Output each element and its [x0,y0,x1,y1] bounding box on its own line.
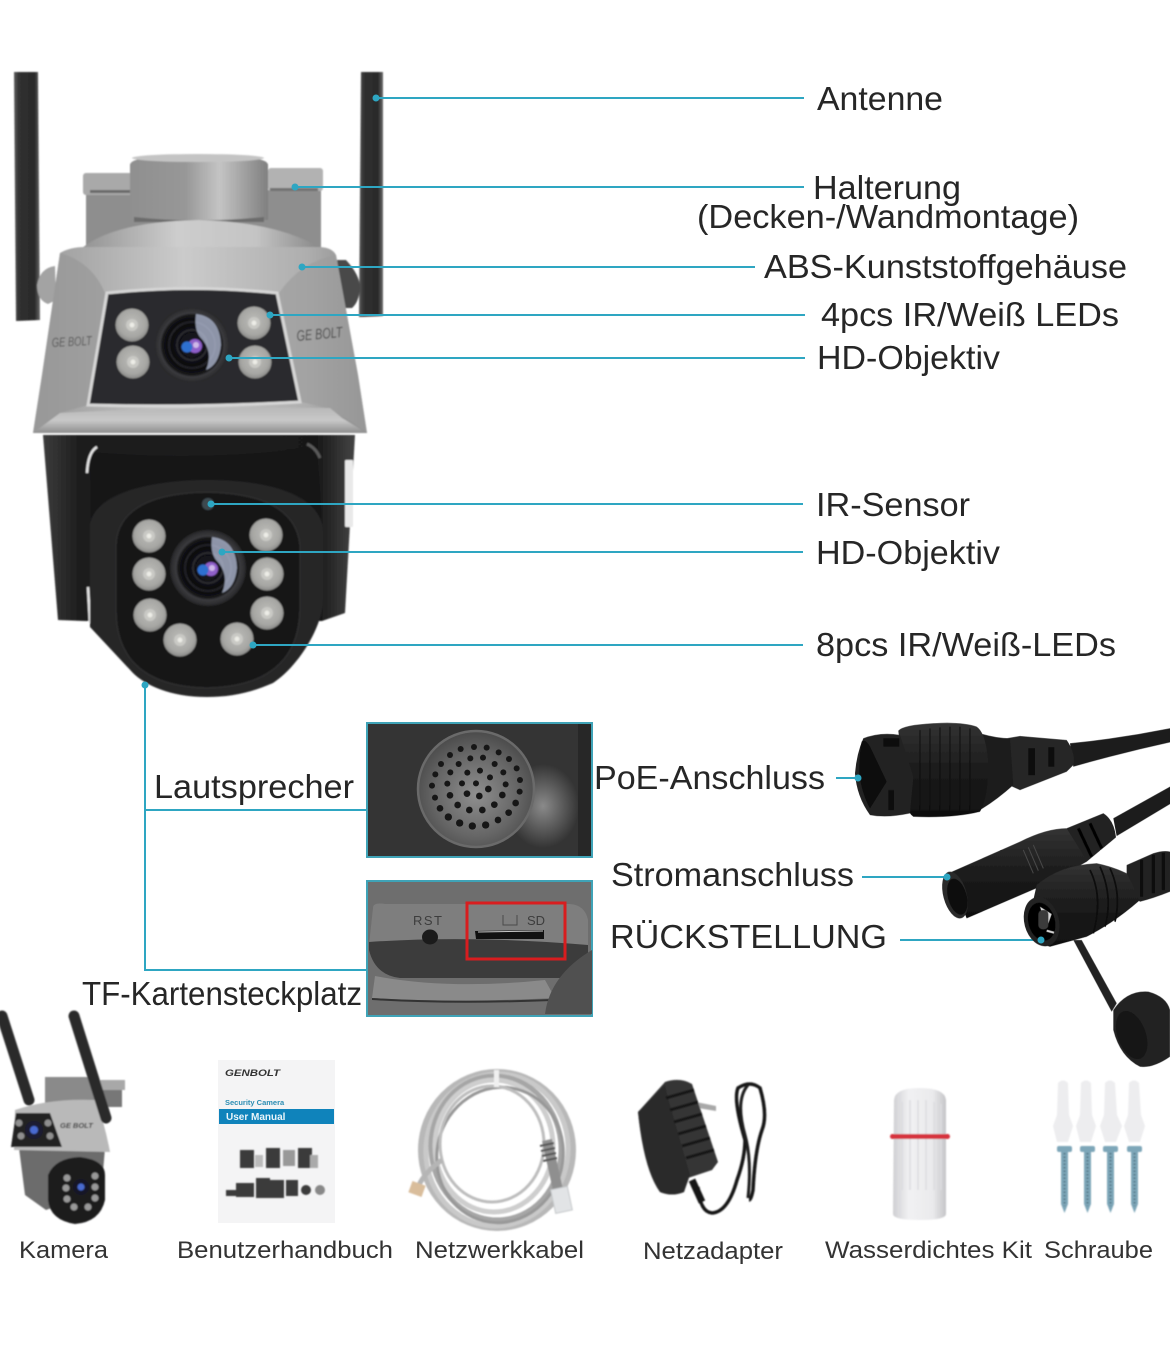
side sticker [345,460,353,527]
speaker grille [418,731,534,847]
label: HD-Objektiv top: HD-Objektiv [817,339,1001,376]
label: ABS-Kunststoffgehäuse: ABS-Kunststoffgehäuse [764,248,1127,285]
right antenna [359,72,383,317]
callout dots [142,94,380,688]
screws [1057,1146,1142,1213]
SD slot photo panel [367,881,592,1016]
label: IR-Sensor: IR-Sensor [816,486,970,523]
black lower body [43,435,355,621]
left antenna [14,72,40,321]
manual logo: GENBOLT [225,1068,282,1078]
connector dots [854,774,1044,944]
label: 8pcs LEDs: 8pcs IR/Weiß-LEDs [816,626,1116,663]
mount cylinder [130,154,268,222]
yoke highlight left [87,447,97,623]
wall anchors [1053,1080,1145,1142]
reset hole [422,930,438,944]
power connector [938,787,1170,921]
left small antenna [2,1016,29,1100]
small head [48,1157,105,1224]
camera head [90,480,323,697]
label: Netzadapter: Netzadapter [643,1238,783,1265]
small lower body [19,1148,105,1210]
front lens panel [88,288,300,406]
left plug [408,1181,426,1197]
accessory: power adapter [638,1080,765,1213]
small mount [45,1077,125,1107]
tube ridges [902,1100,941,1190]
IR sensor [202,498,214,510]
rubber dust cap [1110,992,1170,1067]
brand left: GE BOLT [51,333,93,350]
top lens [154,307,230,383]
right small antenna [74,1016,106,1118]
small top LEDs [16,1120,54,1140]
accessory: network cable [408,1065,578,1236]
manual title: User Manual [226,1112,286,1123]
accessory: screws and anchors [1053,1080,1145,1213]
accessory: camera [2,1016,125,1224]
label: HD-Objektiv bottom: HD-Objektiv [816,534,1001,571]
accessory: user manual [218,1060,335,1223]
speaker photo panel [367,723,592,857]
small product pictures [226,1148,325,1198]
head face [116,492,300,688]
small brand: GE BOLT [60,1121,94,1130]
card symbol [503,915,517,925]
label: Netzwerkkabel: Netzwerkkabel [415,1237,584,1264]
small dark panel [11,1113,62,1147]
RST text: RST [413,913,444,928]
label: Benutzerhandbuch: Benutzerhandbuch [177,1237,393,1264]
cable tie [494,1070,499,1087]
label: Rückstellung: RÜCKSTELLUNG [610,918,887,955]
dome [72,220,335,258]
label: Wasserdichtes Kit: Wasserdichtes Kit [825,1237,1032,1264]
pivot left [37,266,56,304]
screw threads [1064,1153,1134,1206]
label: Lautsprecher: Lautsprecher [154,768,354,805]
adapter prong [696,1102,716,1111]
red ring [890,1134,950,1139]
card slot [475,930,544,939]
four panel LEDs [116,306,272,378]
label: PoE-Anschluss: PoE-Anschluss [594,759,825,796]
left plug tail [419,1160,442,1185]
reset connector [1018,851,1170,1012]
label: Stromanschluss: Stromanschluss [611,856,854,893]
accessory: waterproof kit [890,1088,950,1220]
label: Kamera: Kamera [19,1237,108,1264]
cord relief [692,1180,702,1202]
wall and ceiling mount [83,168,323,252]
adapter cord second loop [741,1085,749,1198]
small head LEDs [62,1172,98,1210]
PoE connector [855,723,1170,817]
label: Decken-/Wandmontage: (Decken-/Wandmontage) [697,198,1079,235]
pivot right [337,260,360,308]
slot edge [478,931,543,932]
SD text: SD [527,913,545,928]
callout lines [145,98,1041,970]
brand right: GE BOLT [296,324,344,345]
label: 4pcs LEDs: 4pcs IR/Weiß LEDs [821,296,1119,333]
light reflection [507,764,579,848]
adapter side [638,1085,690,1194]
small head lens [73,1179,89,1195]
yoke highlight right [307,444,320,458]
housing brim [33,408,367,433]
yoke opening [90,447,323,620]
connector cables [855,723,1170,1067]
adapter ribs [666,1090,714,1158]
speaker right shadow [578,724,591,856]
small top lens [25,1121,43,1139]
bottom lens [170,530,246,606]
eight head LEDs [132,518,284,656]
main camera illustration [14,72,383,697]
manual subtitle: Security Camera [225,1098,285,1107]
housing side shadows [33,253,105,433]
label: Halterung: Halterung [813,169,961,206]
label: Schraube: Schraube [1044,1237,1153,1264]
adapter body [638,1080,718,1194]
label: TF-Kartensteckplatz: TF-Kartensteckplatz [82,975,362,1012]
label: Antenne: Antenne [817,80,943,117]
small housing [14,1100,110,1152]
red highlight box [467,903,565,959]
right plug [551,1186,572,1213]
manual blue band [219,1109,334,1124]
ABS housing [33,247,367,433]
relief ribs [540,1143,557,1161]
right strain relief [547,1140,558,1190]
adapter cord [698,1084,765,1213]
